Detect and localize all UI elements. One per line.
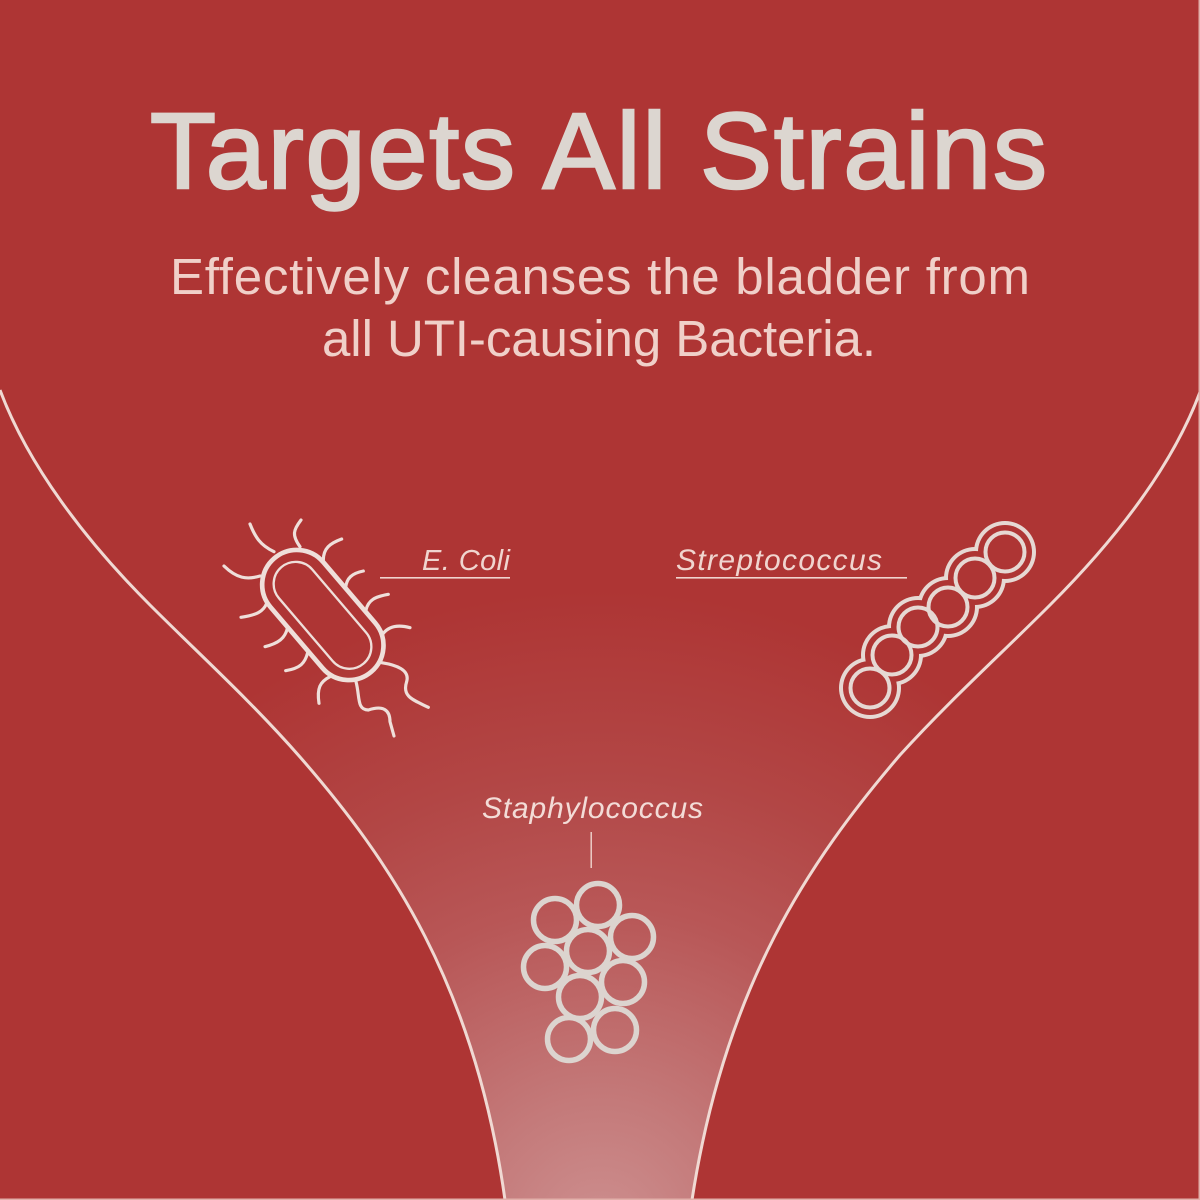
icon: Staphylococcus cluster: [524, 884, 654, 1060]
label: Staphylococcus: Staphylococcus: [482, 792, 703, 825]
label: E. Coli: E. Coli: [422, 545, 512, 577]
subtitle: [170, 248, 1030, 367]
icon: E. coli bacterium: [224, 520, 428, 736]
subtitle: Effectively cleanses the bladder from: [170, 248, 1030, 305]
icon: Streptococcus chain: [839, 521, 1036, 719]
label: Streptococcus: Streptococcus: [676, 544, 882, 577]
subtitle: all UTI-causing Bacteria.: [322, 310, 876, 367]
title: Targets All Strains: [150, 90, 1047, 211]
label: E. Coli: [380, 545, 512, 579]
